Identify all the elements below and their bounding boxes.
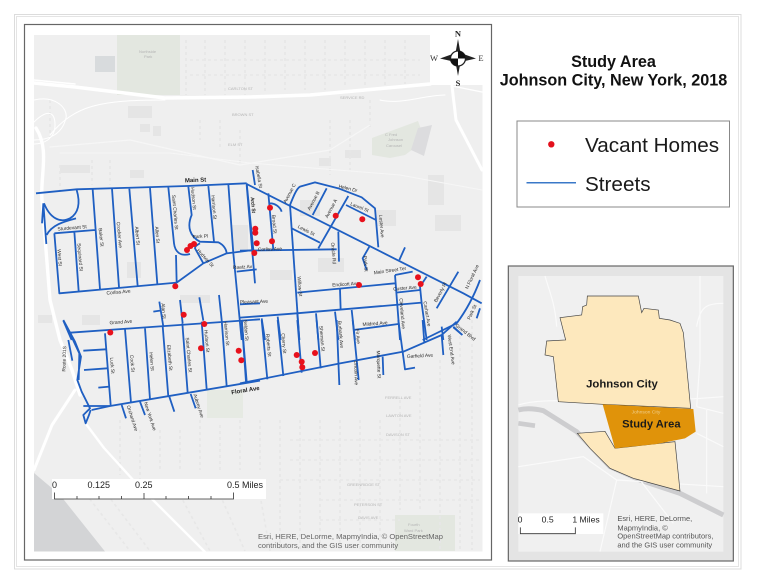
- river area: [34, 473, 105, 552]
- east street labels: Broad St: [270, 215, 278, 235]
- west street labels: Corliss Ave: [106, 289, 131, 297]
- faint basemap labels: C Fred: [385, 132, 397, 137]
- Johnson City polygon: Johnson City: [586, 379, 659, 391]
- attribution: Esri, HERE, DeLorme, MapmyIndia, © OpenStreetMap: [258, 532, 443, 541]
- locator attribution: MapmyIndia, ©: [617, 523, 668, 532]
- park: Northside Park: [117, 35, 180, 95]
- locator scale bar: 1 Miles: [572, 514, 600, 524]
- east street labels: Avenue B: [306, 190, 322, 212]
- title: Johnson City, New York, 2018: [500, 72, 727, 90]
- park: Fourth Ward Park: [395, 515, 455, 551]
- south street labels: Selden St: [242, 320, 250, 342]
- locator scale bar: 0.5: [542, 514, 554, 524]
- east street labels: Willow St: [295, 276, 303, 297]
- southeast street labels: Lincoln Ave: [352, 361, 359, 386]
- east street labels: Cleveland Ave: [397, 298, 406, 329]
- faint basemap labels: PETERSON ST: [354, 502, 383, 507]
- scale bar: 0.25: [135, 480, 153, 490]
- icon: north arrow compass: W: [430, 53, 438, 63]
- east street labels: Avenue A: [324, 198, 339, 219]
- faint basemap labels: [139, 49, 423, 533]
- faint basemap labels: BROWN ST: [232, 112, 254, 117]
- faint basemap labels: Ward Park: [404, 528, 423, 533]
- south street labels: Helen St: [147, 352, 155, 372]
- title: [500, 53, 727, 90]
- west street labels: Albert St: [133, 226, 141, 246]
- faint basemap labels: Johnson: [388, 137, 403, 142]
- vacant homes points: [107, 205, 424, 370]
- faint basemap labels: DAVIS AVE: [358, 515, 379, 520]
- panel: locator map: [508, 266, 733, 561]
- south street labels: Elizabeth St: [165, 345, 173, 371]
- faint basemap labels: FERRELL AVE: [385, 395, 412, 400]
- faint basemap labels: Fourth: [408, 522, 420, 527]
- west street labels: Crocker Ave: [115, 222, 123, 249]
- southeast street labels: Fir Ave: [354, 329, 361, 344]
- east street labels: Mildred Ave: [362, 320, 388, 328]
- southeast street labels: Sherman St: [317, 326, 326, 352]
- street network east: [240, 165, 482, 343]
- faint basemap labels: Carousel: [386, 143, 402, 148]
- west street labels: Saint Charles St: [170, 195, 179, 231]
- southeast street labels: Roberts St: [264, 334, 272, 358]
- faint basemap labels: DAVISON ST: [386, 432, 410, 437]
- west street labels: Raatz Av: [233, 264, 253, 271]
- west street labels: Hudson St: [189, 187, 197, 211]
- west street labels: Main St: [185, 178, 206, 184]
- basemap: [34, 35, 482, 552]
- attribution: [258, 532, 443, 550]
- faint basemap labels: SERVICE RD: [340, 95, 364, 100]
- legend item: streets: [526, 173, 651, 196]
- legend: [517, 121, 730, 207]
- south street labels: Saint Charles St: [184, 337, 193, 373]
- south street labels: Cook St: [128, 355, 136, 373]
- east street labels: Main Street Ter: [373, 266, 407, 276]
- Study Area polygon: [603, 404, 696, 448]
- west street labels: Alan St: [159, 303, 167, 320]
- Study Area polygon: Study Area: [622, 419, 681, 431]
- icon: north arrow compass: [430, 28, 484, 88]
- icon: north arrow compass: N: [455, 28, 462, 38]
- west street labels: Harrison St: [209, 195, 217, 220]
- park: CFJ Park: [372, 121, 425, 158]
- south street labels: Aubrey Ave: [191, 393, 205, 419]
- icon: north arrow compass: S: [456, 78, 461, 88]
- legend item: streets: Streets: [585, 173, 651, 196]
- east street labels: Lewis St: [296, 224, 316, 238]
- west street labels: Park Pl: [192, 234, 208, 240]
- locator attribution: [617, 514, 713, 549]
- southeast street labels: Marquette St: [375, 351, 382, 379]
- east street labels: [240, 165, 481, 343]
- east street labels: Avenue C: [282, 182, 298, 204]
- south street labels: Hudson St: [202, 330, 210, 353]
- title: Study Area: [571, 53, 657, 71]
- west street labels: Sturdevant St: [57, 224, 88, 233]
- east street labels: Helen Dr: [338, 184, 358, 194]
- scale bar: 0.125: [88, 480, 110, 490]
- west street labels: Hudson St: [195, 248, 215, 269]
- east street labels: Lester Ave: [377, 215, 385, 238]
- west street labels: Sequinard St: [75, 243, 84, 272]
- legend item: vacant homes: Vacant Homes: [585, 134, 719, 157]
- east street labels: Custer Ave: [393, 285, 417, 293]
- scale bar: 0: [52, 480, 57, 490]
- southeast street labels: Cherry St: [279, 333, 287, 354]
- south street labels: Luck St: [108, 357, 115, 375]
- west street labels: Grand Ave: [109, 319, 133, 326]
- Study Area polygon: Johnson City: [632, 410, 661, 416]
- street network southeast: [240, 320, 462, 386]
- west street labels: Baker St: [97, 228, 105, 248]
- panel: main street map: [24, 24, 492, 560]
- east street labels: Beverly Pl: [433, 282, 449, 304]
- west street labels: Arch St: [249, 197, 256, 214]
- locator attribution: and the GIS user community: [617, 540, 712, 549]
- south street labels: New York Ave: [142, 401, 157, 432]
- east street labels: Carhart Ave: [421, 301, 432, 327]
- southeast street labels: Burbank Ave: [336, 321, 344, 349]
- east street labels: Laurel St: [349, 201, 370, 214]
- locator scale bar: [518, 513, 603, 534]
- southeast street labels: Garfield Ave: [407, 353, 434, 360]
- east street labels: Grand Blvd: [454, 323, 477, 343]
- white road network: [34, 80, 482, 552]
- faint basemap labels: Northside: [139, 49, 157, 54]
- east street labels: Arch St: [249, 197, 256, 214]
- south street labels: [61, 320, 261, 432]
- south street labels: Floral Ave: [231, 386, 261, 396]
- east street labels: Corliss Ave: [258, 246, 282, 253]
- icon: north arrow compass: E: [478, 53, 484, 63]
- south street labels: Harrison St: [222, 321, 230, 347]
- faint basemap labels: LAWTON AVE: [386, 413, 412, 418]
- east street labels: Pleasant Ave: [240, 299, 268, 306]
- southeast street labels: [264, 321, 456, 386]
- faint basemap labels: GREENRIDGE ST: [347, 482, 381, 487]
- east street labels: Park St: [361, 256, 369, 273]
- southeast street labels: West End Ave: [446, 334, 456, 365]
- east street labels: Endicott Ave: [332, 281, 359, 289]
- Johnson City polygon: [545, 296, 691, 491]
- street network west: [36, 178, 260, 340]
- east street labels: Isabella St: [253, 165, 263, 189]
- attribution: contributors, and the GIS user community: [258, 541, 398, 550]
- faint basemap labels: Park: [144, 54, 152, 59]
- faint basemap labels: CARLTON ST: [228, 86, 254, 91]
- locator attribution: OpenStreetMap contributors,: [617, 532, 713, 541]
- south street labels: Orchard Ave: [125, 405, 139, 432]
- west street labels: Allen St: [153, 226, 160, 244]
- east street labels: Oracle Rd: [329, 242, 337, 265]
- west street labels: [55, 178, 256, 326]
- scale bar: [52, 479, 266, 499]
- west street labels: West St: [55, 249, 63, 267]
- faint basemap labels: ELM ST: [228, 142, 243, 147]
- east street labels: Park St: [466, 303, 479, 321]
- faint residential grid: [50, 40, 480, 551]
- locator scale bar: 0: [518, 514, 523, 524]
- scale bar: 0.5 Miles: [227, 480, 264, 490]
- locator attribution: Esri, HERE, DeLorme,: [617, 514, 692, 523]
- street network south: [61, 320, 261, 432]
- south street labels: Route 201S: [61, 346, 68, 372]
- locator basemap: [518, 276, 723, 552]
- east street labels: N Floral Ave: [464, 264, 481, 290]
